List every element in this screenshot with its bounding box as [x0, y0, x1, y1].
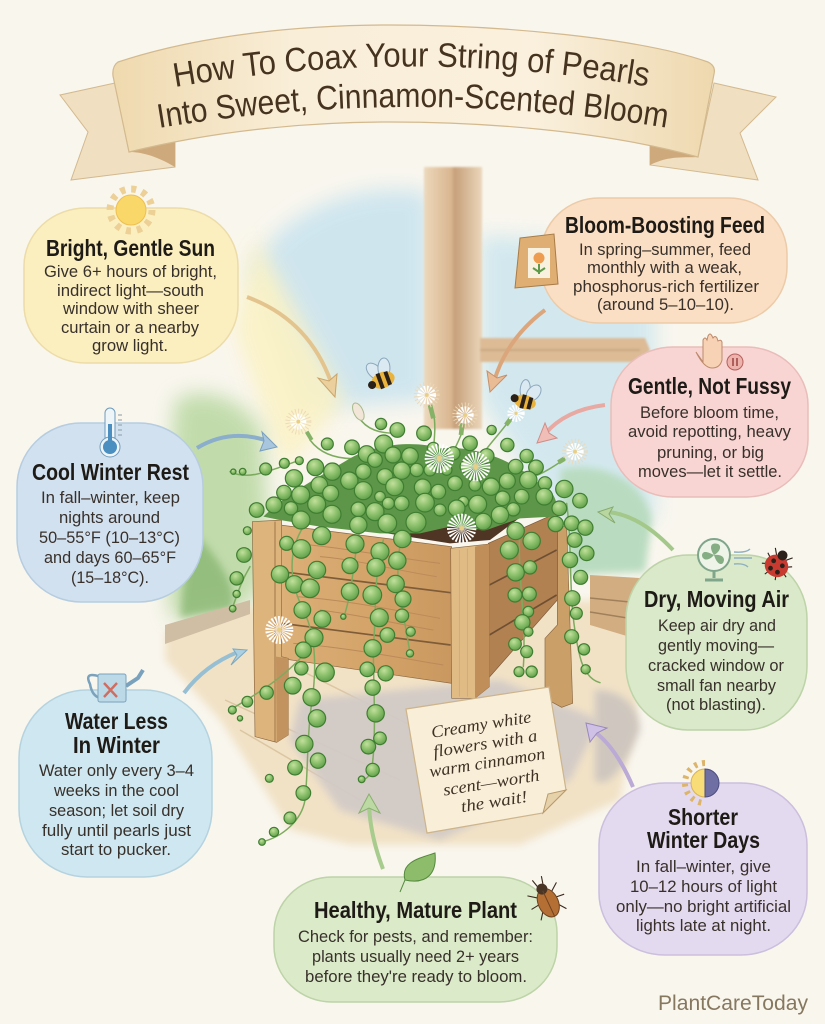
body text: moves—let it settle.	[638, 462, 782, 481]
body text: Before bloom time,	[640, 403, 779, 422]
heading	[647, 804, 760, 853]
panel: water less in winter	[19, 670, 212, 877]
hanging stems	[230, 503, 600, 842]
panel: healthy, mature plant	[274, 853, 571, 1002]
arrow: air to plant	[598, 507, 673, 550]
title text: Into Sweet, Cinnamon-Scented Bloom	[158, 84, 667, 128]
note text: warm cinnamon	[428, 744, 546, 781]
icon: ladybug	[758, 544, 797, 584]
body text: window with sheer	[62, 299, 199, 318]
front panel	[280, 525, 452, 683]
banner main ribbon	[113, 25, 714, 157]
banner left tail	[60, 83, 175, 180]
panel: cool winter rest	[17, 408, 203, 602]
body text: only—no bright artificial	[616, 897, 791, 916]
arrow: healthy to plant	[359, 794, 383, 869]
title text: How To Coax Your String of Pearls	[174, 43, 648, 87]
arrow: water to plant	[184, 649, 247, 693]
body text: Keep air dry and	[658, 616, 776, 635]
brand wordmark: PlantCareToday	[658, 992, 808, 1015]
heading: Gentle, Not Fussy	[628, 373, 791, 399]
body text: and days 60–65°F	[44, 548, 176, 567]
body text: Give 6+ hours of bright,	[44, 262, 217, 281]
body text: Water only every 3–4	[39, 761, 194, 780]
back right leg	[545, 527, 573, 707]
panel: dry, moving air	[626, 539, 807, 730]
heading: Healthy, Mature Plant	[314, 897, 517, 923]
note card	[406, 687, 566, 833]
icon: bee one	[360, 354, 399, 393]
body text: fully until pearls just	[42, 821, 191, 840]
body text	[648, 616, 784, 714]
body text	[39, 488, 180, 587]
icon: fan	[698, 539, 730, 580]
body text: In spring–summer, feed	[579, 240, 751, 259]
arrow: feed to plant	[487, 310, 545, 392]
body text: In fall–winter, give	[636, 857, 771, 876]
note text	[428, 707, 546, 816]
title banner	[59, 24, 777, 181]
icon: thermometer	[100, 408, 122, 457]
leafy mound backing	[263, 444, 556, 533]
arrow: gentle to plant	[537, 405, 605, 443]
body text: curtain or a nearby	[61, 318, 199, 337]
body text: avoid repotting, heavy	[628, 422, 791, 441]
note text: scent—worth	[442, 766, 541, 800]
body text: pruning, or big	[657, 443, 764, 462]
body text: small fan nearby	[657, 676, 776, 695]
title text	[158, 43, 667, 128]
body text: 10–12 hours of light	[630, 877, 777, 896]
string of pearls foliage	[228, 418, 594, 845]
planter and plant illustration	[228, 387, 600, 845]
body text	[39, 761, 194, 859]
icon: seed packet	[515, 234, 558, 288]
panel: shorter winter days	[599, 763, 807, 955]
body text	[628, 403, 791, 481]
icon: sun and moon	[685, 763, 719, 803]
icon: sun	[110, 189, 152, 231]
body text: cracked window or	[648, 656, 784, 675]
body text: season; let soil dry	[49, 801, 184, 820]
note text: flowers with a	[432, 726, 538, 761]
heading: Winter Days	[647, 827, 760, 853]
body text: plants usually need 2+ years	[312, 947, 519, 966]
front centre leg	[451, 544, 489, 698]
body text: lights late at night.	[636, 916, 771, 935]
arrow: cool rest to plant	[197, 432, 277, 451]
right side panel	[488, 513, 557, 678]
icon: leaf	[400, 853, 435, 892]
body text: weeks in the cool	[53, 781, 179, 800]
body text	[298, 927, 533, 986]
panel: gentle, not fussy	[611, 334, 808, 497]
window frame	[424, 167, 650, 429]
icon: beetle	[521, 871, 571, 924]
panel: bright, gentle sun	[24, 189, 238, 363]
heading	[65, 708, 168, 758]
body text: In fall–winter, keep	[41, 488, 180, 507]
front left leg	[252, 520, 288, 742]
flowers	[272, 387, 583, 637]
heading: Cool Winter Rest	[32, 459, 189, 485]
body text: start to pucker.	[61, 840, 171, 859]
body text: monthly with a weak,	[587, 258, 742, 277]
soil	[282, 503, 537, 543]
banner fold right	[650, 141, 698, 165]
icon: wind	[734, 549, 752, 567]
icon: watering can	[88, 670, 143, 702]
window scene background	[165, 189, 655, 845]
body text: (not blasting).	[666, 695, 766, 714]
back stems	[230, 413, 563, 610]
body text: indirect light—south	[57, 281, 204, 300]
banner fold left	[129, 140, 175, 167]
body text: grow light.	[92, 336, 168, 355]
icon: bee two	[509, 376, 546, 413]
banner right tail	[650, 83, 776, 180]
body text: (around 5–10–10).	[597, 295, 734, 314]
body text: before they're ready to bloom.	[305, 967, 527, 986]
body text	[573, 240, 759, 314]
body text: 50–55°F (10–13°C)	[39, 528, 180, 547]
panel: bloom-boosting feed	[515, 198, 787, 323]
heading: Dry, Moving Air	[644, 586, 789, 612]
heading: In Winter	[73, 732, 160, 758]
note text: Creamy white	[430, 707, 533, 742]
body text: Check for pests, and remember:	[298, 927, 533, 946]
arrow: days to plant	[586, 723, 633, 787]
body text: (15–18°C).	[71, 568, 149, 587]
body text	[616, 857, 791, 935]
icon: stop hand	[696, 334, 743, 370]
heading: Bloom-Boosting Feed	[565, 212, 765, 238]
note text: the wait!	[460, 787, 529, 816]
heading: Shorter	[668, 804, 738, 830]
arrow: sun to plant	[247, 297, 337, 397]
body text	[44, 262, 217, 355]
body text: gently moving—	[658, 636, 774, 655]
heading: Bright, Gentle Sun	[46, 235, 215, 261]
body text: phosphorus-rich fertilizer	[573, 277, 759, 296]
body text: nights around	[59, 508, 160, 527]
heading: Water Less	[65, 708, 168, 734]
